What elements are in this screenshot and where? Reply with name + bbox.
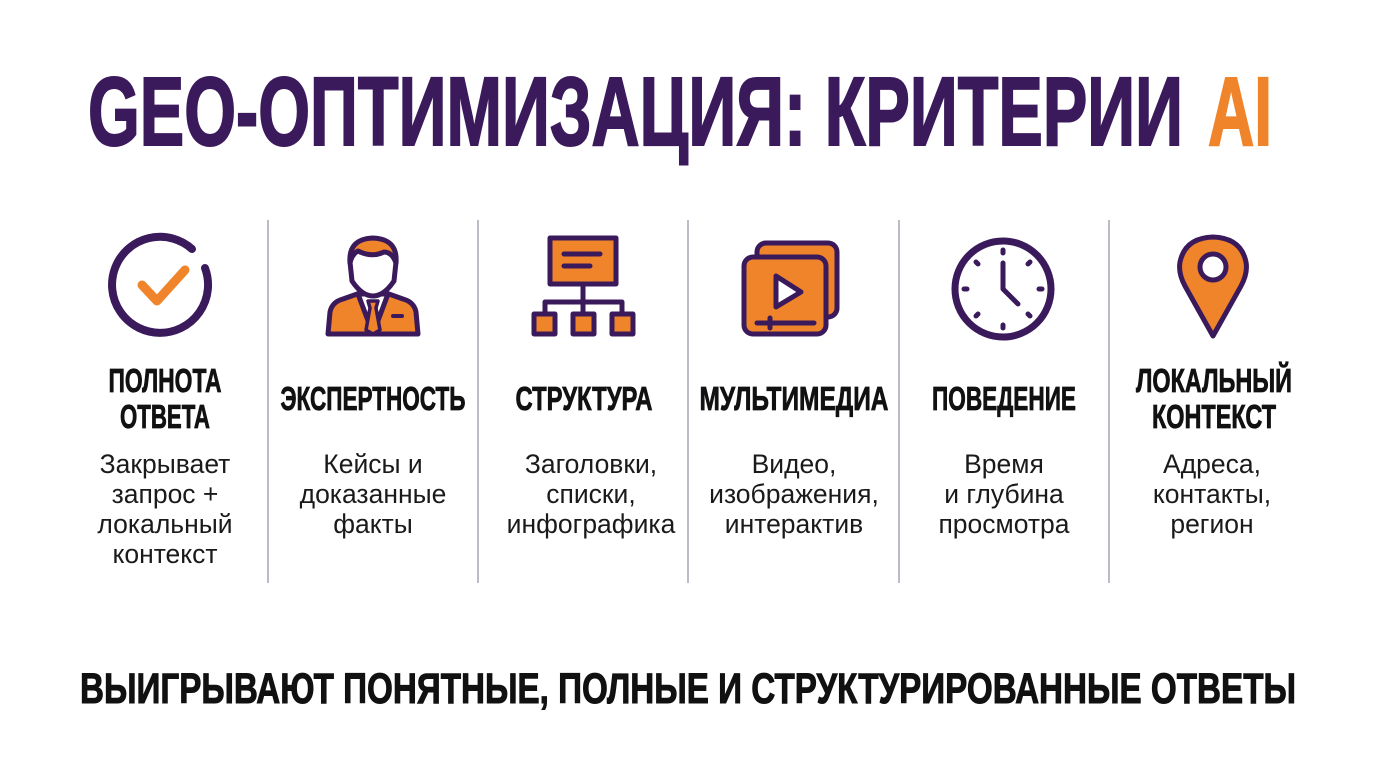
panel: expertise — [280, 238, 466, 539]
icon: video — [744, 243, 837, 334]
title: AI — [1208, 57, 1272, 166]
panel: completeness: запрос + — [112, 479, 218, 509]
panel: structure: Заголовки, — [525, 449, 657, 479]
panel: behaviour: ПОВЕДЕНИЕ — [932, 380, 1076, 417]
panel: expertise: Кейсы и — [323, 449, 423, 479]
panel: local context: КОНТЕКСТ — [1152, 398, 1276, 435]
panel: multimedia: МУЛЬТИМЕДИА — [700, 380, 888, 417]
panel: behaviour: и глубина — [944, 479, 1064, 509]
panel: completeness: Закрывает — [100, 449, 230, 479]
panel: multimedia: Видео, — [752, 449, 836, 479]
panel: multimedia — [700, 243, 888, 539]
panel: structure: списки, — [546, 479, 636, 509]
icon: clock — [955, 241, 1051, 337]
panel: completeness: ОТВЕТА — [120, 398, 210, 435]
panel: expertise: доказанные — [300, 479, 446, 509]
panel: completeness: локальный — [97, 509, 233, 539]
panel: local context — [1136, 237, 1292, 539]
panel: completeness — [97, 237, 233, 569]
panel: multimedia: изображения, — [709, 479, 879, 509]
panel: behaviour — [932, 241, 1076, 539]
panel: completeness: контекст — [112, 539, 218, 569]
panel: expertise: факты — [333, 509, 413, 539]
panel: local context: ЛОКАЛЬНЫЙ — [1136, 361, 1292, 399]
panel: behaviour: просмотра — [938, 509, 1070, 539]
icon: check circle — [112, 237, 208, 333]
panel: behaviour: Время — [964, 449, 1044, 479]
panel: multimedia: интерактив — [725, 509, 863, 539]
panel: structure — [507, 238, 676, 539]
panel: structure: инфографика — [507, 509, 676, 539]
icon: hierarchy — [534, 238, 633, 334]
panel: expertise: ЭКСПЕРТНОСТЬ — [280, 380, 466, 417]
icon: person — [328, 238, 418, 334]
panel: local context: Адреса, — [1163, 449, 1261, 479]
panel: local context: регион — [1170, 509, 1254, 539]
icon: map pin — [1180, 237, 1246, 336]
panel: local context: контакты, — [1153, 479, 1271, 509]
panel: structure: СТРУКТУРА — [516, 380, 652, 417]
panel: completeness: ПОЛНОТА — [108, 362, 222, 399]
